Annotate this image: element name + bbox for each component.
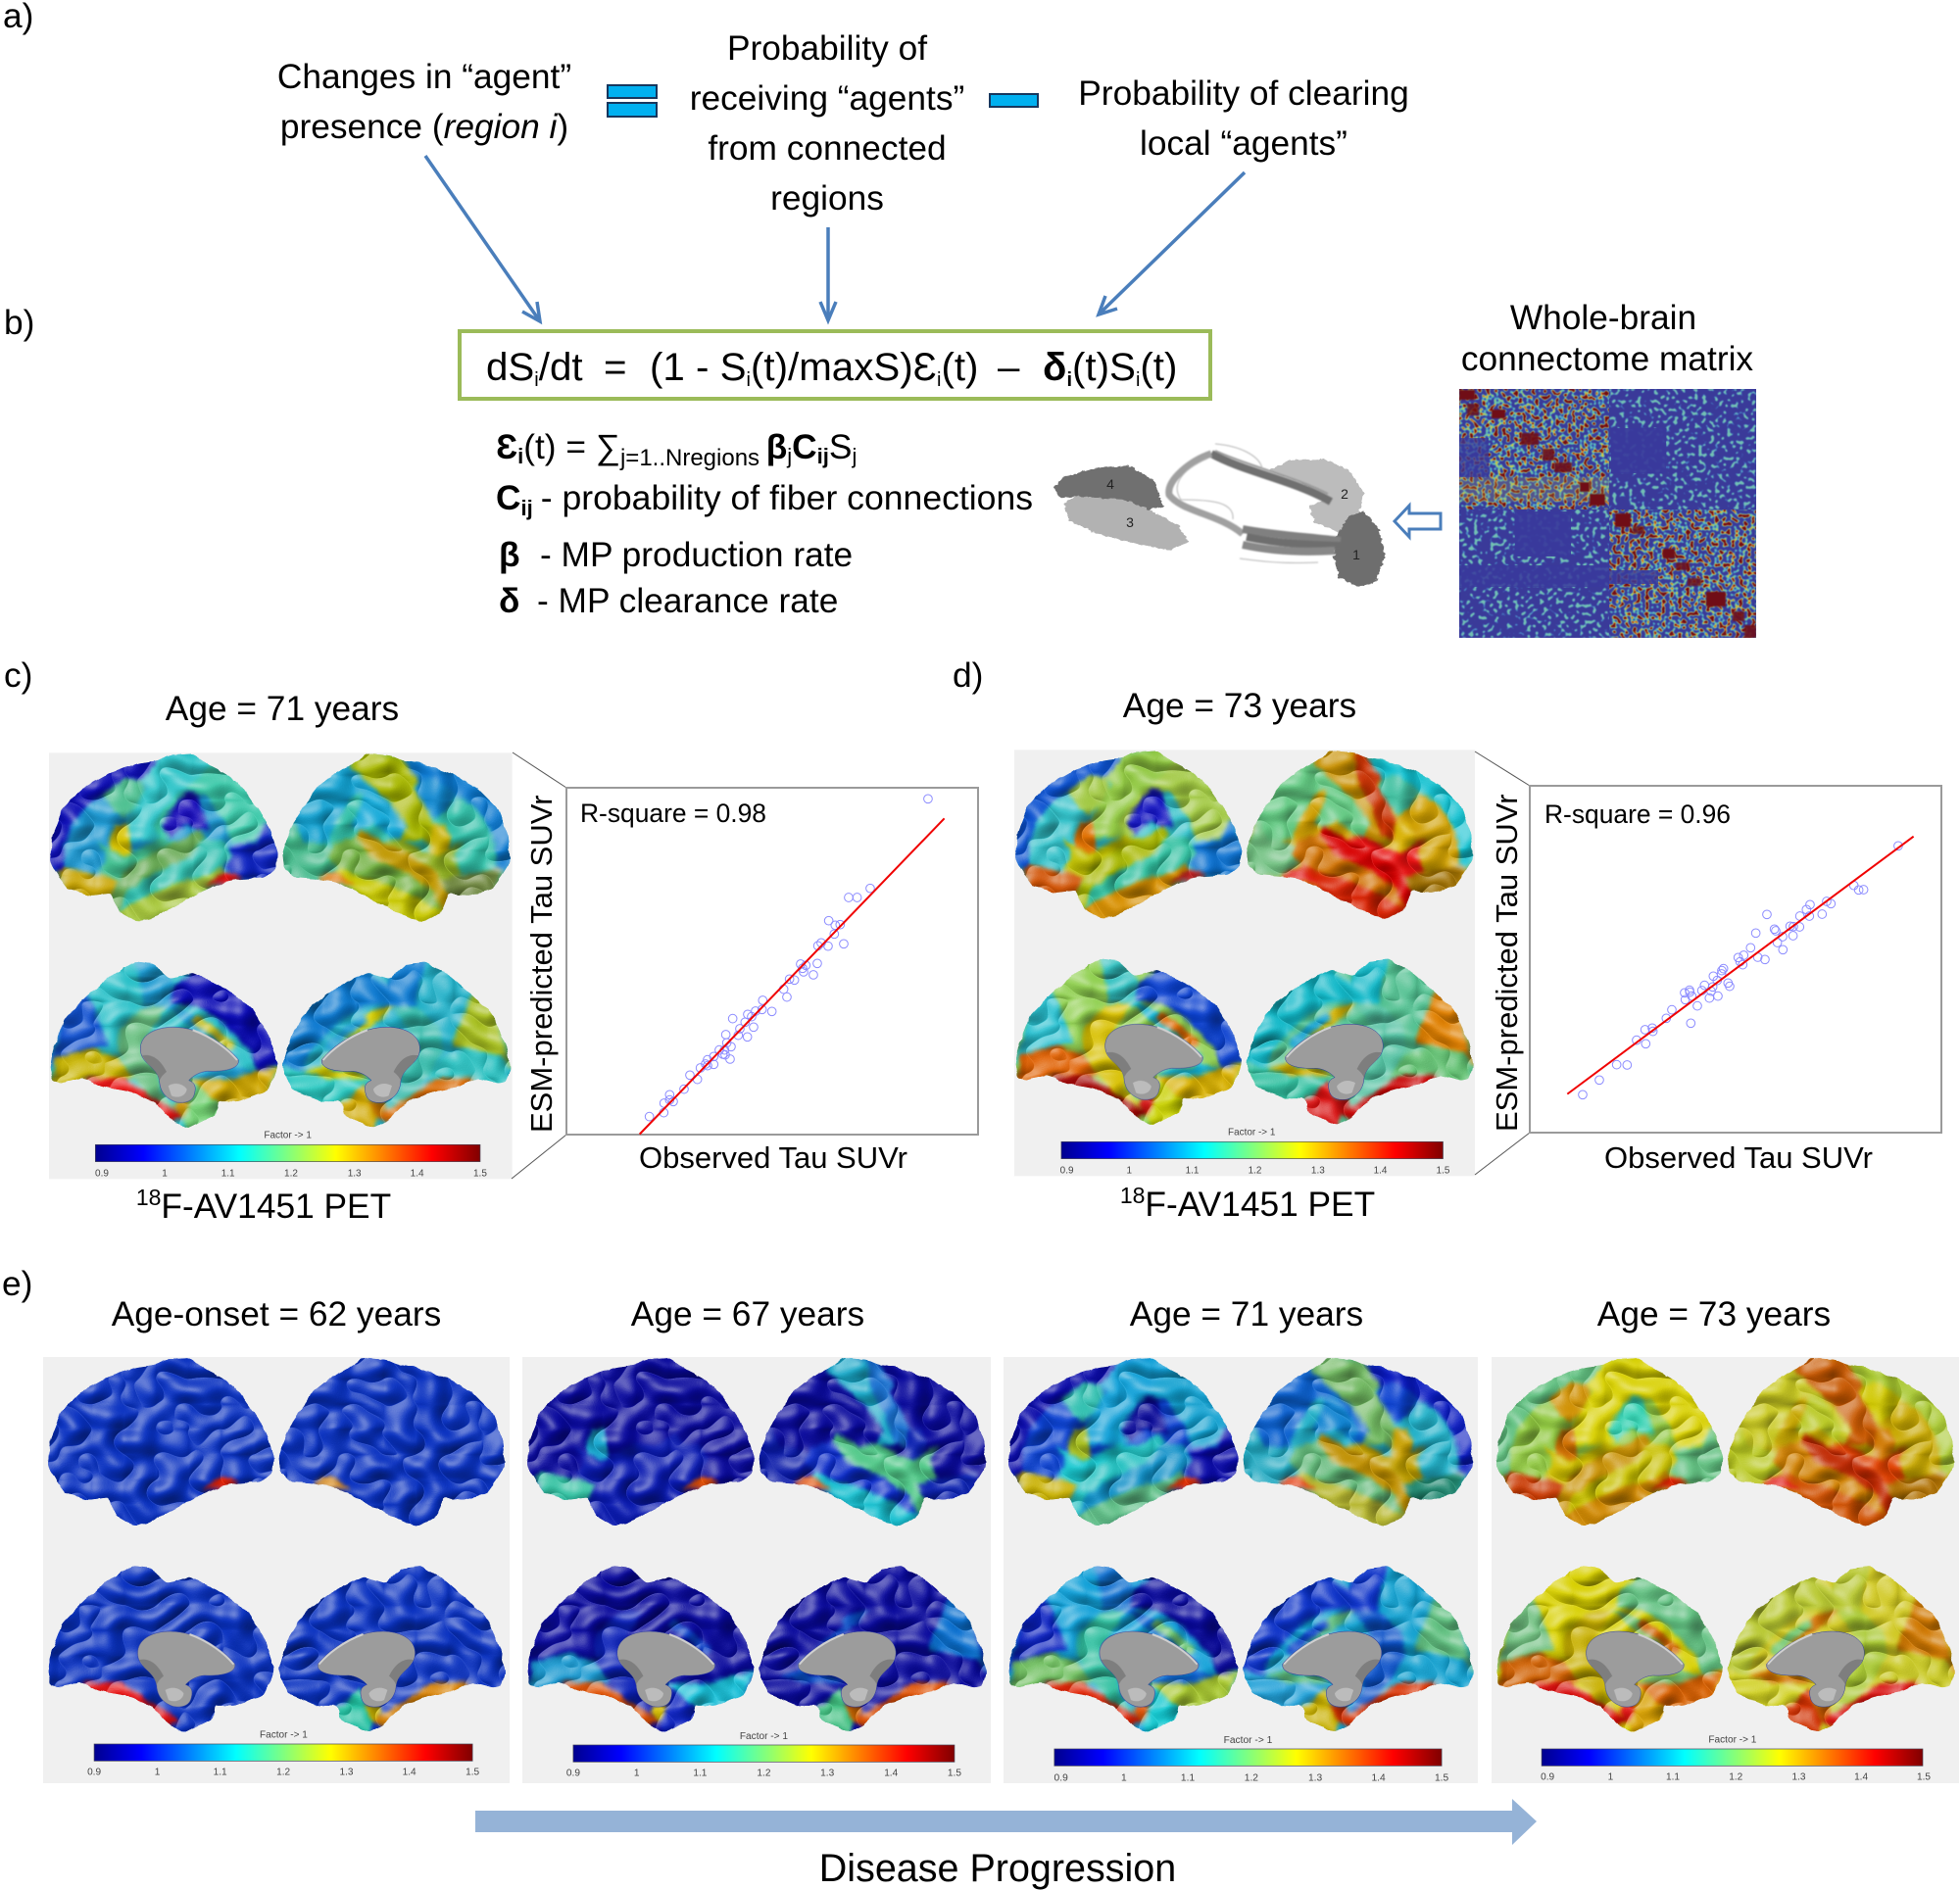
equation box: δ: [1043, 345, 1066, 389]
panel: d brain surfaces: 0.9: [1060, 1165, 1074, 1176]
arrow: disease progression: [475, 1799, 1537, 1845]
text: model definitions: (t) = ∑: [523, 428, 620, 466]
panel: e brain surfaces age 71: 1.2: [1245, 1772, 1258, 1783]
panel: e brain surfaces age 67: 1.3: [820, 1768, 835, 1778]
heading: age 73: Age = 73 years: [1123, 687, 1356, 725]
panel: c brain surfaces: 1: [162, 1168, 168, 1179]
text: probability of receiving agents: receiving “agents”: [690, 79, 964, 118]
scatter plot: c: [524, 788, 978, 1175]
text: model definitions: ij: [521, 496, 533, 520]
text: probability of receiving agents: Probability of: [727, 29, 927, 68]
arrow: clearing to equation: [1099, 172, 1245, 315]
text: model definitions: β: [499, 536, 520, 574]
text: changes in agent presence: Changes in “agent”: [277, 58, 571, 96]
icon: minus sign: [990, 94, 1038, 107]
panel: e brain surfaces age 71: 0.9: [1054, 1772, 1068, 1783]
panel: e brain surfaces age 67: 1.2: [757, 1768, 771, 1778]
equation box: i: [1066, 369, 1072, 391]
panel: e brain surfaces age 67: Factor -> 1: [740, 1731, 788, 1742]
panel: e brain surfaces age 62: 1.2: [276, 1767, 291, 1777]
panel: e brain surfaces age 73: Factor -> 1: [1708, 1734, 1757, 1745]
panel: e brain surfaces age 67: 1.1: [693, 1768, 708, 1778]
panel: c brain surfaces: 0.9: [95, 1168, 109, 1179]
diagram: brain regions and fibre tracts: 2: [1341, 486, 1348, 502]
diagram: brain regions and fibre tracts: 1: [1352, 547, 1360, 562]
icon: equals sign: [608, 85, 657, 117]
text: model definitions: j: [786, 444, 792, 468]
caption: tracer d: F-AV1451 PET: [1145, 1186, 1375, 1224]
equation box: i: [747, 369, 751, 391]
text: model definitions: - MP production rate: [540, 536, 853, 574]
equation box: (1 - S: [650, 345, 747, 389]
panel: e brain surfaces age 62: [43, 1357, 510, 1783]
text: model definitions: j=1..Nregions: [619, 445, 766, 471]
arrow: matrix to tracts: [1395, 506, 1441, 537]
panel: c brain surfaces: 1.2: [284, 1168, 298, 1179]
panel: e brain surfaces age 73: [1492, 1357, 1959, 1783]
text: probability of clearing local agents: local “agents”: [1140, 124, 1348, 163]
panel: e brain surfaces age 62: 1.5: [466, 1767, 480, 1777]
text: model definitions: S: [829, 428, 852, 466]
label: d): d): [953, 656, 983, 695]
diagram: brain regions and fibre tracts: 3: [1126, 514, 1134, 530]
caption: tracer c: F-AV1451 PET: [161, 1187, 391, 1226]
text: probability of receiving agents: from connected: [708, 129, 947, 168]
panel: e brain surfaces age 67: 1: [634, 1768, 640, 1778]
panel: e brain surfaces age 62: 1.3: [340, 1767, 354, 1777]
panel: e brain surfaces age 71: 1.5: [1435, 1772, 1449, 1783]
text: model definitions: δ: [499, 582, 519, 620]
text: probability of clearing local agents: Probability of clearing: [1078, 74, 1409, 113]
scatter plot: c: ESM-predicted Tau SUVr: [524, 795, 559, 1133]
panel: e brain surfaces age 71: 1.3: [1308, 1772, 1323, 1783]
equation box: (t): [941, 345, 978, 389]
panel: e brain surfaces age 73: 1.1: [1666, 1772, 1680, 1783]
arrow: presence to equation: [425, 156, 540, 321]
panel: c brain surfaces: 1.5: [473, 1168, 487, 1179]
panel: e brain surfaces age 73: 0.9: [1541, 1772, 1555, 1783]
panel: c brain surfaces: [49, 752, 513, 1179]
caption: tracer d: 18: [1120, 1183, 1145, 1208]
scatter plot: d: [1490, 786, 1941, 1175]
heading: age 67: Age = 67 years: [631, 1295, 864, 1333]
text: model definitions: i: [517, 444, 523, 468]
panel: e brain surfaces age 62: 1: [155, 1767, 161, 1777]
equation box: i: [1136, 369, 1140, 391]
panel: c brain surfaces: 1.1: [221, 1168, 235, 1179]
equation box: (t)S: [1072, 345, 1136, 389]
panel: e brain surfaces age 73: 1: [1608, 1772, 1614, 1783]
panel: e brain surfaces age 67: [522, 1357, 991, 1783]
panel: e brain surfaces age 71: 1.1: [1181, 1772, 1196, 1783]
panel: e brain surfaces age 73: 1.5: [1917, 1772, 1931, 1783]
text: model definitions: C: [496, 479, 521, 517]
equation box: dS: [486, 345, 534, 389]
text: model definitions: ij: [817, 444, 829, 468]
panel: d brain surfaces: 1.4: [1374, 1165, 1388, 1176]
text: model definitions: - probability of fiber connections: [541, 478, 1033, 517]
panel: e brain surfaces age 67: 1.4: [884, 1768, 899, 1778]
panel: c brain surfaces: 1.4: [411, 1168, 424, 1179]
arrow: receiving to equation: [820, 227, 836, 320]
equation box: (t)/maxS)Ɛ: [751, 345, 937, 389]
scatter plot: c: R-square = 0.98: [580, 799, 766, 828]
zoom connector lines d: [1475, 751, 1530, 1175]
text: model definitions: Ɛ: [496, 428, 517, 466]
scatter plot: d: Observed Tau SUVr: [1604, 1140, 1873, 1175]
label: c): c): [4, 656, 32, 695]
panel: e brain surfaces age 71: [1004, 1357, 1478, 1783]
panel: c brain surfaces: Factor -> 1: [264, 1131, 312, 1141]
panel: d brain surfaces: Factor -> 1: [1228, 1128, 1276, 1139]
caption: disease progression: Disease Progression: [819, 1847, 1176, 1890]
panel: d brain surfaces: 1.1: [1186, 1165, 1200, 1176]
panel: d brain surfaces: 1.3: [1311, 1165, 1325, 1176]
scatter plot: d: ESM-predicted Tau SUVr: [1490, 794, 1524, 1132]
equation box: (t): [1140, 345, 1177, 389]
label: b): b): [4, 304, 34, 342]
equation box: i: [937, 369, 941, 391]
equation box: /dt: [539, 345, 583, 389]
heading: connectome matrix: connectome matrix: [1461, 340, 1753, 378]
text: model definitions: - MP clearance rate: [537, 582, 838, 620]
heatmap: connectome matrix: [1459, 389, 1756, 638]
text: model definitions: j: [851, 444, 857, 468]
equation box: i: [534, 369, 539, 391]
heading: age 71: Age = 71 years: [166, 690, 399, 728]
zoom connector lines c: [512, 752, 566, 1179]
equation box: [460, 331, 1210, 399]
panel: e brain surfaces age 73: 1.4: [1854, 1772, 1869, 1783]
panel: e brain surfaces age 73: 1.3: [1792, 1772, 1806, 1783]
panel: e brain surfaces age 62: Factor -> 1: [260, 1729, 308, 1740]
text: probability of receiving agents: regions: [770, 179, 884, 218]
caption: tracer c: 18: [136, 1185, 161, 1210]
panel: e brain surfaces age 67: 1.5: [948, 1768, 961, 1778]
label: e): e): [2, 1265, 32, 1303]
panel: e brain surfaces age 71: 1: [1121, 1772, 1127, 1783]
heading: connectome matrix: Whole-brain: [1510, 299, 1696, 337]
heading: age onset 62: Age-onset = 62 years: [112, 1295, 441, 1333]
panel: e brain surfaces age 62: 1.4: [403, 1767, 416, 1777]
text: model definitions: C: [792, 428, 817, 466]
text: model definitions: [496, 428, 1033, 620]
scatter plot: c: Observed Tau SUVr: [639, 1140, 907, 1175]
panel: d brain surfaces: 1.5: [1437, 1165, 1450, 1176]
panel: d brain surfaces: 1: [1126, 1165, 1132, 1176]
panel: c brain surfaces: 1.3: [348, 1168, 362, 1179]
panel: d brain surfaces: 1.2: [1249, 1165, 1262, 1176]
panel: e brain surfaces age 67: 0.9: [566, 1768, 580, 1778]
panel: d brain surfaces: [1014, 750, 1475, 1176]
equation box: =: [604, 345, 627, 389]
panel: e brain surfaces age 71: Factor -> 1: [1224, 1735, 1273, 1746]
panel: e brain surfaces age 62: 1.1: [214, 1767, 227, 1777]
text: changes in agent presence: presence (region i): [280, 108, 568, 146]
diagram: brain regions and fibre tracts: 4: [1106, 476, 1114, 492]
panel: e brain surfaces age 73: 1.2: [1729, 1772, 1743, 1783]
heading: age 71 progression: Age = 71 years: [1130, 1295, 1363, 1333]
equation box: –: [998, 345, 1020, 389]
diagram: brain regions and fibre tracts: [1053, 444, 1385, 587]
scatter plot: d: R-square = 0.96: [1544, 800, 1731, 829]
text: model definitions: β: [766, 428, 787, 466]
panel: e brain surfaces age 71: 1.4: [1371, 1772, 1386, 1783]
panel: e brain surfaces age 62: 0.9: [87, 1767, 101, 1777]
heading: age 73 progression: Age = 73 years: [1597, 1295, 1831, 1333]
